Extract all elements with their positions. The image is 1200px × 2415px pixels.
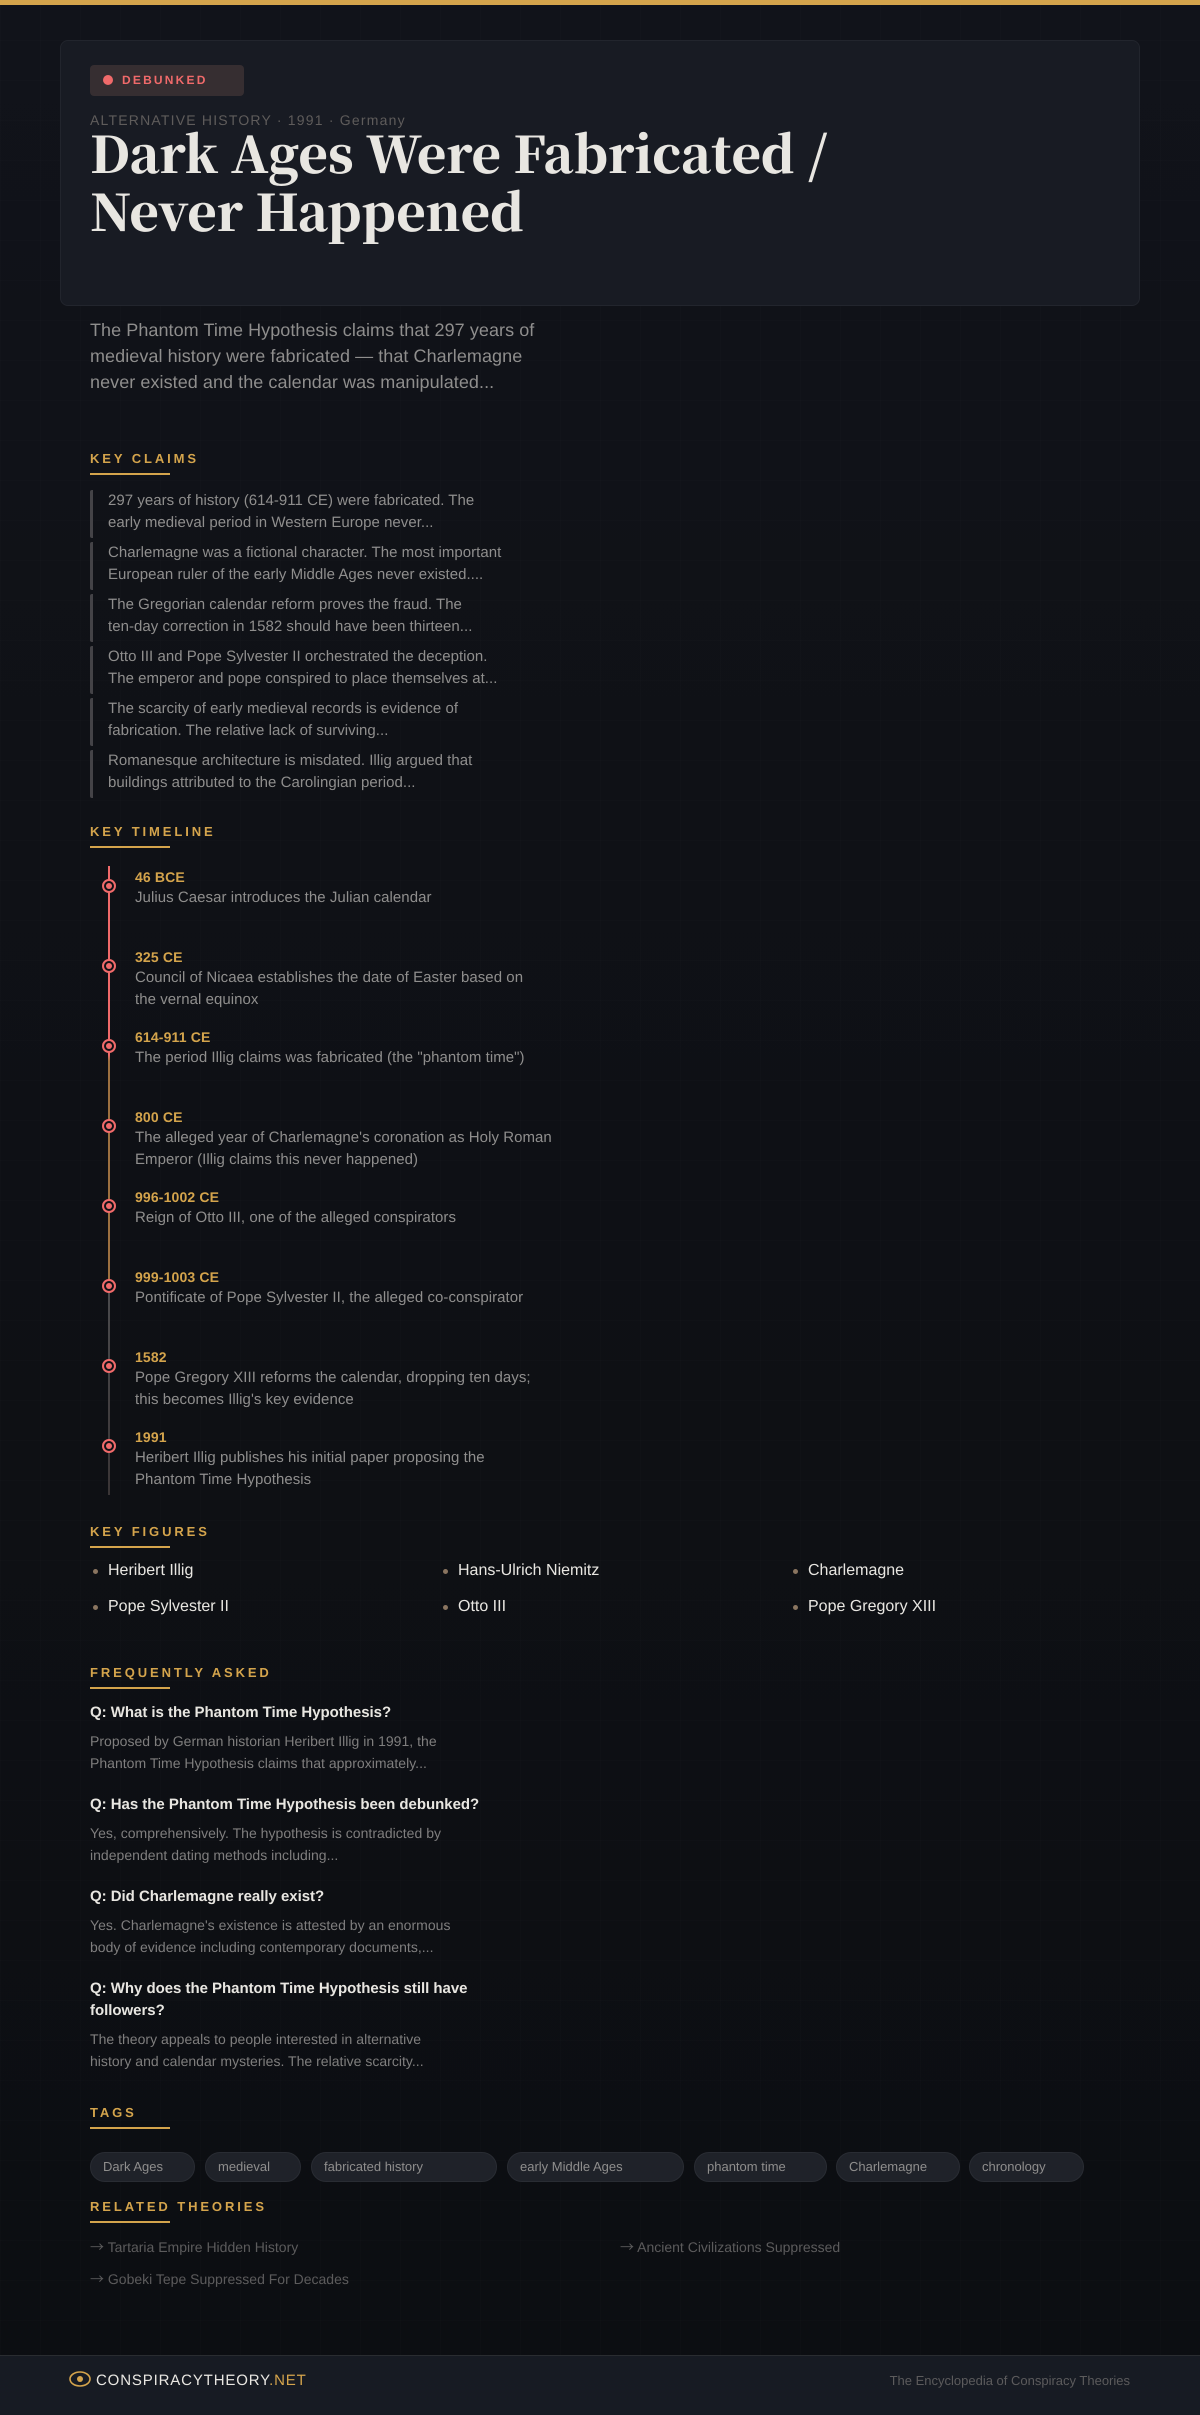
related link: Ancient Civilizations: → Ancient Civilizations Suppressed — [620, 2237, 840, 2257]
event: 325 CE: Council of Nicaea establishes the date of Easter based on — [135, 969, 523, 986]
event: 46 BCE — [102, 869, 432, 906]
heading: frequently asked: FREQUENTLY ASKED — [90, 1665, 272, 1680]
event: 325 CE: 325 CE — [135, 949, 183, 965]
claim 1 — [90, 490, 550, 538]
heading: key claims: KEY CLAIMS — [90, 451, 199, 466]
tag: phantom time — [694, 2152, 827, 2182]
figure: Heribert Illig: Heribert Illig — [108, 1562, 193, 1579]
claim 2: Charlemagne was a fictional character. The most important — [108, 544, 501, 561]
faq 2: Yes, comprehensively. The hypothesis is contradicted by — [90, 1825, 441, 1841]
event: 996-1002 CE: Reign of Otto III, one of the alleged conspirators — [135, 1209, 456, 1226]
icon: status dot — [103, 75, 113, 85]
timeline rail — [108, 866, 110, 1495]
heading: tags: TAGS — [90, 2105, 137, 2120]
event: 1991: 1991 — [135, 1429, 167, 1445]
intro paragraph — [90, 320, 534, 392]
claim 5 — [90, 698, 550, 746]
tag: early Middle Ages — [507, 2152, 684, 2182]
claim 1: early medieval period in Western Europe never... — [108, 514, 434, 531]
claim 6 — [90, 750, 550, 798]
faq 1: Proposed by German historian Heribert Illig in 1991, the — [90, 1733, 437, 1749]
claim 3: The Gregorian calendar reform proves the fraud. The — [108, 596, 462, 613]
event: 800 CE: Emperor (Illig claims this never happened) — [135, 1151, 418, 1168]
event: 999-1003 CE: 999-1003 CE — [135, 1269, 219, 1285]
event: 1582 — [102, 1349, 531, 1408]
category and origin line: ALTERNATIVE HISTORY · 1991 · Germany — [90, 112, 406, 128]
event: 800 CE — [102, 1109, 552, 1168]
faq 4 — [90, 1980, 467, 2069]
heading: key figures: KEY FIGURES — [90, 1524, 210, 1539]
claim 5: The scarcity of early medieval records is evidence of — [108, 700, 458, 717]
footer — [0, 2355, 1200, 2415]
intro paragraph: medieval history were fabricated — that Charlemagne — [90, 346, 522, 366]
event: 46 BCE: 46 BCE — [135, 869, 185, 885]
icon: eye logo — [69, 2371, 91, 2387]
faq 1: Q: What is the Phantom Time Hypothesis? — [90, 1704, 391, 1721]
event: 1582: 1582 — [135, 1349, 167, 1365]
figure: Otto III: Otto III — [458, 1598, 506, 1615]
faq 3: body of evidence including contemporary documents,... — [90, 1939, 433, 1955]
event: 1582: Pope Gregory XIII reforms the calendar, dropping ten days; — [135, 1369, 531, 1386]
figure: Charlemagne: Charlemagne — [808, 1562, 904, 1579]
faq 2 — [90, 1796, 479, 1863]
faq 4: The theory appeals to people interested in alternative — [90, 2031, 421, 2047]
event: 999-1003 CE: Pontificate of Pope Sylvester II, the alleged co-conspirator — [135, 1289, 523, 1306]
faq 4: Q: Why does the Phantom Time Hypothesis still have — [90, 1980, 467, 1997]
tag: medieval: medieval — [218, 2159, 270, 2174]
claim 3: ten-day correction in 1582 should have been thirteen... — [108, 618, 472, 635]
figure: Pope Gregory XIII: Pope Gregory XIII — [808, 1598, 936, 1615]
event: 1991 — [102, 1429, 485, 1488]
event: 800 CE: 800 CE — [135, 1109, 183, 1125]
panel: hero header — [60, 40, 1140, 306]
related link: Gobeki Tepe: → Gobeki Tepe Suppressed For Decades — [90, 2269, 349, 2289]
heading: related theories: RELATED THEORIES — [90, 2199, 267, 2214]
event: 996-1002 CE — [102, 1189, 456, 1226]
claim 3 — [90, 594, 550, 642]
intro paragraph: never existed and the calendar was manipulated... — [90, 372, 494, 392]
faq 4: followers? — [90, 2002, 165, 2019]
title — [90, 116, 829, 246]
claim 4 — [90, 646, 550, 694]
event: 996-1002 CE: 996-1002 CE — [135, 1189, 219, 1205]
faq 4: history and calendar mysteries. The relative scarcity... — [90, 2053, 424, 2069]
title: Never Happened — [90, 174, 524, 246]
related link: Tartaria: → Tartaria Empire Hidden History — [90, 2237, 298, 2257]
claim 4: The emperor and pope conspired to place themselves at... — [108, 670, 497, 687]
event: 614-911 CE — [102, 1029, 525, 1066]
event: 1582: this becomes Illig's key evidence — [135, 1391, 354, 1408]
footer tagline: The Encyclopedia of Conspiracy Theories — [890, 2373, 1130, 2388]
top accent bar — [0, 0, 1200, 5]
tag: Charlemagne — [836, 2152, 960, 2182]
faq 1 — [90, 1704, 437, 1771]
badge label: DEBUNKED — [122, 73, 208, 87]
tag: Charlemagne: Charlemagne — [849, 2159, 927, 2174]
logo wordmark: CONSPIRACYTHEORY.NET — [96, 2372, 307, 2389]
event: 1991: Phantom Time Hypothesis — [135, 1471, 311, 1488]
claim 6: buildings attributed to the Carolingian period... — [108, 774, 416, 791]
faq 3: Yes. Charlemagne's existence is attested by an enormous — [90, 1917, 450, 1933]
faq 3: Q: Did Charlemagne really exist? — [90, 1888, 324, 1905]
claim 4: Otto III and Pope Sylvester II orchestrated the deception. — [108, 648, 487, 665]
tag: phantom time: phantom time — [707, 2159, 786, 2174]
claim 6: Romanesque architecture is misdated. Illig argued that — [108, 752, 472, 769]
event: 325 CE: the vernal equinox — [135, 991, 258, 1008]
tag: medieval — [205, 2152, 301, 2182]
event: 325 CE — [102, 949, 523, 1008]
figure: Hans-Ulrich Niemitz: Hans-Ulrich Niemitz — [458, 1562, 599, 1579]
event: 999-1003 CE — [102, 1269, 523, 1306]
faq 1: Phantom Time Hypothesis claims that approximately... — [90, 1755, 427, 1771]
claim 2 — [90, 542, 550, 590]
heading: key timeline: KEY TIMELINE — [90, 824, 216, 839]
title: Dark Ages Were Fabricated / — [90, 116, 829, 188]
tag: early Middle Ages: early Middle Ages — [520, 2159, 623, 2174]
status badge: debunked — [90, 65, 244, 96]
faq 2: independent dating methods including... — [90, 1847, 338, 1863]
event: 614-911 CE: 614-911 CE — [135, 1029, 210, 1045]
event: 800 CE: The alleged year of Charlemagne's coronation as Holy Roman — [135, 1129, 552, 1146]
tag: chronology: chronology — [982, 2159, 1046, 2174]
claim list — [90, 490, 502, 798]
event: 1991: Heribert Illig publishes his initial paper proposing the — [135, 1449, 485, 1466]
tag: fabricated history: fabricated history — [324, 2159, 423, 2174]
event: 614-911 CE: The period Illig claims was fabricated (the "phantom time") — [135, 1049, 525, 1066]
claim 2: European ruler of the early Middle Ages never existed.... — [108, 566, 483, 583]
faq 2: Q: Has the Phantom Time Hypothesis been debunked? — [90, 1796, 479, 1813]
figure: Pope Sylvester II: Pope Sylvester II — [108, 1598, 229, 1615]
tag: Dark Ages — [90, 2152, 195, 2182]
intro paragraph: The Phantom Time Hypothesis claims that 297 years of — [90, 320, 534, 340]
event: 46 BCE: Julius Caesar introduces the Julian calendar — [135, 889, 432, 906]
claim 1: 297 years of history (614-911 CE) were fabricated. The — [108, 492, 474, 509]
tag: fabricated history — [311, 2152, 497, 2182]
claim 5: fabrication. The relative lack of surviving... — [108, 722, 388, 739]
tag: chronology — [969, 2152, 1084, 2182]
faq 3 — [90, 1888, 450, 1955]
tag: Dark Ages: Dark Ages — [103, 2159, 163, 2174]
